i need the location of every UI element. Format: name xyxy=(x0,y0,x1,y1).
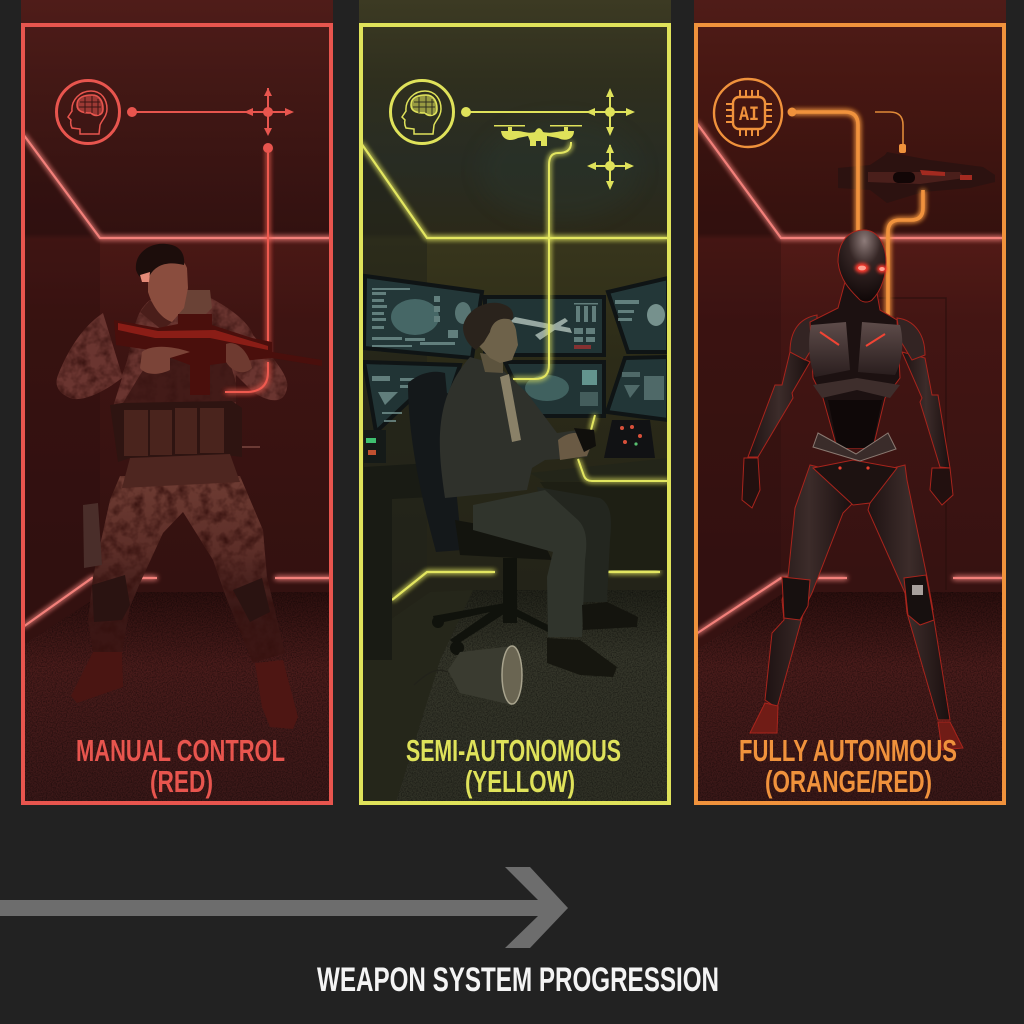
icon: AI chip: AI xyxy=(739,104,759,127)
door xyxy=(878,297,947,590)
icon: control arrows and link xyxy=(461,88,635,190)
desk xyxy=(364,464,422,660)
figure: soldier xyxy=(56,244,322,729)
room neon lines xyxy=(361,143,669,600)
icon: drone xyxy=(494,125,582,146)
carpet floor xyxy=(696,592,1004,805)
icon: AI chip xyxy=(714,79,796,147)
overturned bucket xyxy=(437,645,523,705)
label: manual control: MANUAL CONTROL xyxy=(76,733,285,768)
door handle xyxy=(240,446,260,448)
figure: humanoid robot xyxy=(742,230,963,750)
spacecraft xyxy=(838,152,995,203)
label: semi-autonomous: SEMI-AUTONOMOUS xyxy=(406,733,621,768)
room neon lines xyxy=(23,134,333,627)
icon: human brain xyxy=(390,80,454,144)
room neon lines xyxy=(696,122,1004,634)
panel: semi-autonomous xyxy=(359,0,671,805)
carpet floor xyxy=(395,590,669,805)
panel border xyxy=(361,25,669,803)
control console xyxy=(604,420,655,458)
figure: seated operator xyxy=(408,303,638,677)
wire in front of arm xyxy=(225,362,268,392)
label: semi-autonomous: (YELLOW) xyxy=(465,764,575,799)
monitor details xyxy=(372,288,665,422)
monitors xyxy=(364,276,668,432)
icon: human brain xyxy=(56,80,120,144)
panel: fully autonomous xyxy=(694,0,1006,805)
panel: manual control xyxy=(21,0,333,805)
wires xyxy=(513,142,669,481)
label: manual control: (RED) xyxy=(150,764,213,799)
label: semi-autonomous xyxy=(406,733,621,799)
wires xyxy=(792,112,923,320)
label: fully autonomous xyxy=(739,733,957,799)
icon: control arrows xyxy=(127,88,294,153)
label: fully autonomous: (ORANGE/RED) xyxy=(765,764,932,799)
wire behind soldier xyxy=(267,148,269,362)
panel border xyxy=(23,25,331,803)
arrow: progression xyxy=(0,867,568,948)
heading: weapon system progression: WEAPON SYSTEM PROGRESSION xyxy=(317,961,719,999)
carpet floor xyxy=(23,592,333,805)
panel border xyxy=(696,25,1004,803)
label: manual control xyxy=(76,733,285,799)
